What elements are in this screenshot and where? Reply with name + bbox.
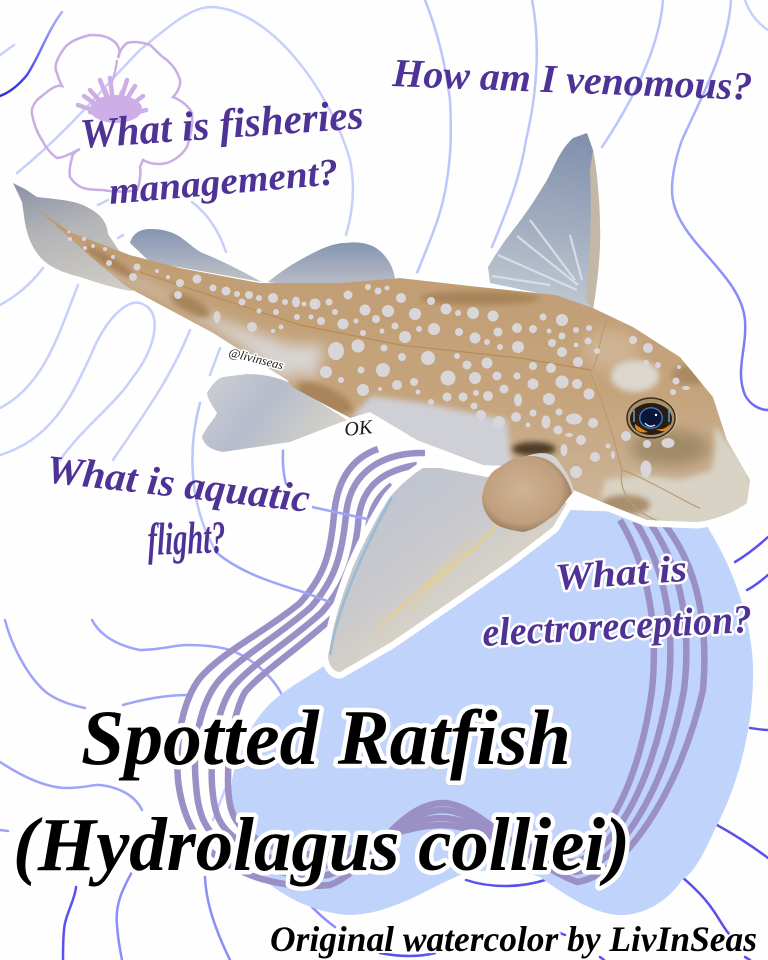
question: fisheries management [78, 92, 365, 213]
first dorsal lobe [268, 242, 395, 292]
white halo [13, 183, 750, 672]
signature: @livinseas: @livinseas [227, 345, 285, 372]
pectoral fin base [482, 453, 574, 532]
eye [627, 397, 677, 439]
spots [68, 230, 690, 478]
credit: Original watercolor by LivInSeas [270, 919, 757, 959]
question: electroreception [481, 548, 753, 655]
tail fin [13, 183, 170, 291]
signature: OK: OK [343, 416, 375, 441]
title: (Hydrolagus colliei) [13, 803, 630, 887]
dark fin root [512, 442, 556, 456]
question: electroreception: electroreception? [481, 596, 753, 655]
question: fisheries management: What is fisheries [78, 92, 365, 158]
question: electroreception: What is [554, 548, 688, 599]
question: aquatic flight: What is aquatic [44, 446, 313, 521]
icon: flower [32, 35, 192, 192]
question: aquatic flight: flight? [147, 511, 226, 565]
illustration: spotted ratfish [13, 133, 755, 672]
contour lines crossing stripes [303, 507, 372, 602]
large dorsal fin [488, 133, 600, 310]
large pectoral fin [328, 468, 567, 672]
title [13, 694, 630, 887]
anal fin [202, 374, 347, 452]
question: fisheries management: management? [107, 151, 340, 213]
purple stripes [177, 449, 704, 886]
question: venomous: How am I venomous? [391, 50, 753, 109]
question: aquatic flight [44, 446, 313, 565]
body [35, 207, 755, 530]
blue blob [231, 510, 753, 915]
title: Spotted Ratfish [81, 694, 571, 781]
second dorsal fin [130, 229, 262, 282]
